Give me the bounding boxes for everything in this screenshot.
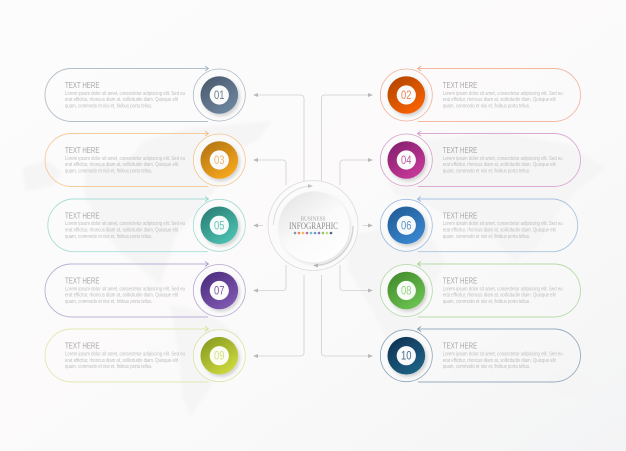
item 05 (48, 196, 245, 252)
hub arc bottom-right (313, 226, 353, 268)
item 02: erat efficitur, rhoncus diam at, sollicitudin diam. Quisque elit (443, 97, 556, 103)
item 05: erat efficitur, rhoncus diam at, sollicitudin diam. Quisque elit (65, 227, 179, 233)
item 07: quam, commodo et nisi et, finibus porta tellus. (65, 299, 152, 305)
hub title: INFOGRAPHIC (289, 221, 338, 231)
item 01: erat efficitur, rhoncus diam at, sollicitudin diam. Quisque elit (65, 97, 179, 103)
item 10: erat efficitur, rhoncus diam at, sollicitudin diam. Quisque elit (443, 358, 556, 364)
item 07: Lorem ipsum dolor sit amet, consectetur adipiscing elit. Sed eu (65, 286, 185, 292)
connector 10 (322, 275, 373, 358)
item 05: 05 (214, 220, 225, 232)
connector 01 (253, 93, 304, 183)
connector 09 (253, 275, 304, 358)
item 06: 06 (401, 220, 412, 232)
item 01: quam, commodo et nisi et, finibus porta tellus. (65, 104, 152, 110)
item 10: Lorem ipsum dolor sit amet, consectetur adipiscing elit. Sed eu (443, 352, 563, 358)
item 09 (45, 326, 245, 382)
item 06: erat efficitur, rhoncus diam at, sollicitudin diam. Quisque elit (443, 227, 556, 233)
item 06: Lorem ipsum dolor sit amet, consectetur adipiscing elit. Sed eu (443, 221, 563, 227)
item 02: quam, commodo et nisi et, finibus porta tellus. (443, 104, 530, 110)
item 04: quam, commodo et nisi et, finibus porta tellus. (443, 168, 530, 174)
item 03: 03 (214, 155, 225, 167)
item 03: quam, commodo et nisi et, finibus porta tellus. (65, 168, 152, 174)
item 06: quam, commodo et nisi et, finibus porta tellus. (443, 234, 530, 240)
item 02: TEXT HERE (443, 81, 478, 90)
item 08: Lorem ipsum dolor sit amet, consectetur adipiscing elit. Sed eu (443, 286, 563, 292)
connector 05 (253, 224, 263, 228)
item 09: TEXT HERE (65, 342, 100, 351)
item 01: Lorem ipsum dolor sit amet, consectetur adipiscing elit. Sed eu (65, 91, 185, 97)
connector 07 (253, 265, 286, 292)
connector 08 (340, 265, 373, 292)
connector 02 (322, 93, 373, 183)
item 07: erat efficitur, rhoncus diam at, sollicitudin diam. Quisque elit (65, 293, 179, 299)
item 05: TEXT HERE (65, 211, 100, 220)
item 02: Lorem ipsum dolor sit amet, consectetur adipiscing elit. Sed eu (443, 91, 563, 97)
item 10: 10 (401, 351, 412, 363)
item 04: erat efficitur, rhoncus diam at, sollicitudin diam. Quisque elit (443, 162, 556, 168)
item 10: quam, commodo et nisi et, finibus porta tellus. (443, 364, 530, 370)
item 07 (45, 262, 245, 317)
item 01: 01 (214, 90, 225, 102)
connector 03 (253, 158, 286, 185)
connector lines (253, 93, 373, 358)
central hub (268, 180, 358, 270)
item 09: erat efficitur, rhoncus diam at, sollicitudin diam. Quisque elit (65, 358, 179, 364)
item 10: TEXT HERE (443, 342, 478, 351)
hub colour dots (294, 232, 332, 234)
item 08: TEXT HERE (443, 276, 478, 286)
item 05: Lorem ipsum dolor sit amet, consectetur adipiscing elit. Sed eu (65, 221, 185, 227)
hub title (289, 216, 338, 231)
item 09: quam, commodo et nisi et, finibus porta tellus. (65, 364, 152, 370)
item 08 (380, 262, 580, 317)
item 05: quam, commodo et nisi et, finibus porta tellus. (65, 234, 152, 240)
item 01 (45, 66, 245, 122)
item 08: erat efficitur, rhoncus diam at, sollicitudin diam. Quisque elit (443, 293, 556, 299)
item 03 (45, 131, 245, 186)
item 07: TEXT HERE (65, 276, 100, 286)
item 06 (380, 196, 578, 252)
hub disk (278, 192, 350, 262)
item 09: 09 (214, 351, 225, 363)
item 04: Lorem ipsum dolor sit amet, consectetur adipiscing elit. Sed eu (443, 156, 563, 162)
item 08: quam, commodo et nisi et, finibus porta tellus. (443, 299, 530, 305)
item 06: TEXT HERE (443, 211, 478, 220)
item 04: 04 (401, 155, 412, 167)
item 03: Lorem ipsum dolor sit amet, consectetur adipiscing elit. Sed eu (65, 156, 185, 162)
item 03: erat efficitur, rhoncus diam at, sollicitudin diam. Quisque elit (65, 162, 179, 168)
hub title: BUSINESS (300, 216, 326, 222)
connector 06 (363, 224, 373, 228)
item 01: TEXT HERE (65, 81, 100, 90)
item 04: TEXT HERE (443, 146, 478, 155)
item 09: Lorem ipsum dolor sit amet, consectetur adipiscing elit. Sed eu (65, 352, 185, 358)
item 02: 02 (401, 90, 412, 102)
item 02 (380, 66, 580, 122)
item 04 (380, 131, 580, 186)
item 10 (380, 326, 580, 382)
world map backdrop (22, 121, 606, 418)
connector 04 (340, 158, 373, 185)
item 03: TEXT HERE (65, 146, 100, 155)
item 08: 08 (401, 286, 412, 298)
item 07: 07 (214, 286, 225, 298)
hub arc top-left (274, 184, 313, 225)
